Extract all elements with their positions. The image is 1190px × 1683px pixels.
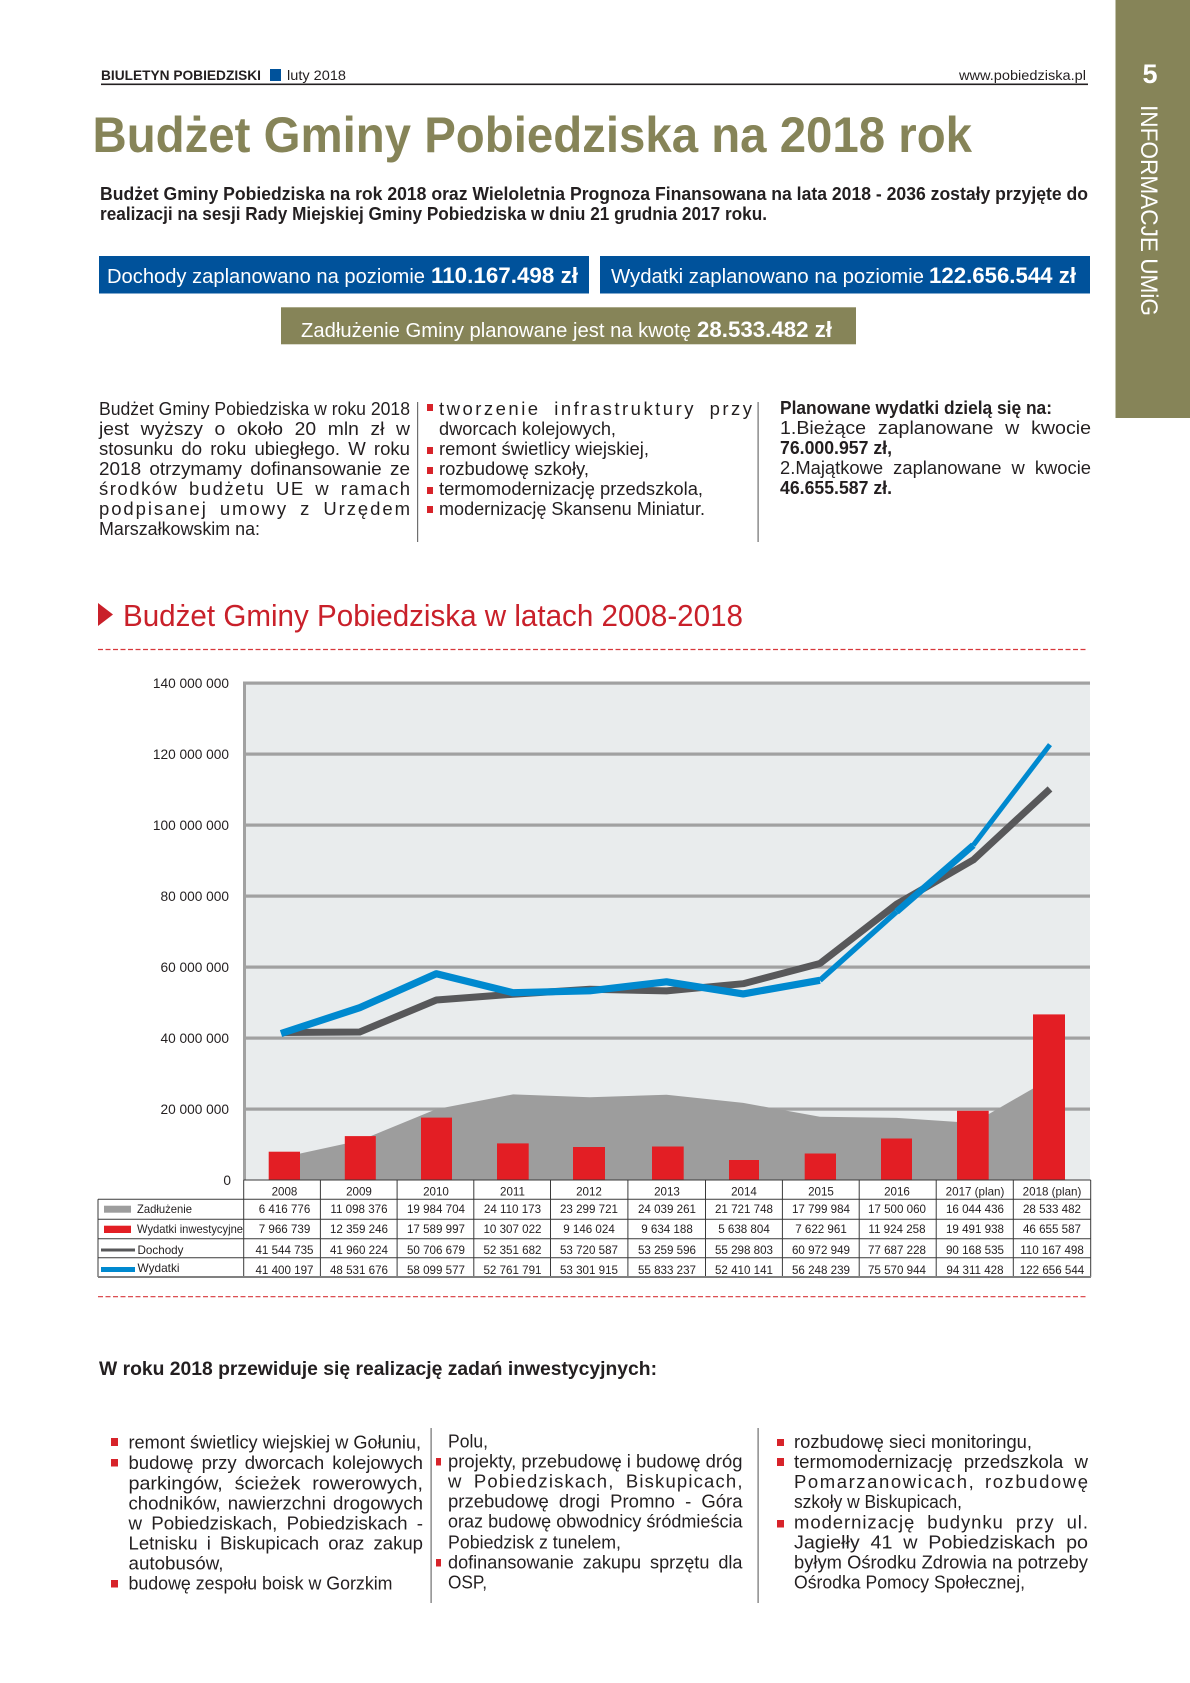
investment list: column 1: w Pobiedziskach, Pobiedziskach - bbox=[127, 1512, 423, 1534]
row: debt: 17 799 984 bbox=[792, 1203, 851, 1216]
row: investment expenditure bbox=[259, 1223, 1081, 1236]
year headers: 2009 bbox=[346, 1186, 372, 1198]
row: expenditure: 94 311 428 bbox=[946, 1264, 1004, 1277]
y axis labels: 20 000 000 bbox=[160, 1102, 229, 1117]
year headers: 2014 bbox=[731, 1186, 757, 1198]
investment list: column 3: Jagiełły 41 w Pobiedziskach po bbox=[794, 1532, 1088, 1552]
row: debt: 24 110 173 bbox=[484, 1203, 541, 1216]
investment list: column 1: budowę przy dworcach kolejowych bbox=[128, 1452, 423, 1473]
callout: planned debt: Zadłużenie Gminy planowane jest na kwotę bbox=[301, 320, 691, 342]
investment list: column 1: Letnisku i Biskupicach oraz zakup bbox=[128, 1532, 423, 1554]
investment list: column 3: modernizację budynku przy ul. bbox=[794, 1512, 1088, 1532]
sidebar tab: page number and section bbox=[1116, 0, 1190, 418]
bullet list: EU co-financed projects: rozbudowę szkoły, bbox=[439, 458, 589, 479]
data table with legend bbox=[98, 1180, 1091, 1278]
callout: planned debt: 28.533.482 zł bbox=[697, 317, 832, 342]
row: debt bbox=[259, 1203, 1081, 1216]
row: revenue: 110 167 498 bbox=[1020, 1244, 1084, 1257]
text column: planned expenditure split: 1.Bieżące zaplanowane w kwocie bbox=[780, 417, 1091, 438]
investment list: column 2: Pobiedzisk z tunelem, bbox=[448, 1532, 621, 1552]
bullet list: EU co-financed projects bbox=[427, 398, 753, 519]
running header: BIULETYN POBIEDZISKI bbox=[101, 67, 261, 83]
investment list: column 3 bbox=[777, 1431, 1089, 1592]
intro text: Budżet Gminy Pobiedziska na rok 2018 oraz Wieloletnia Prognoza Finansowana na lata 2018 - 2036 zostały przyjęte do bbox=[100, 183, 1088, 204]
year headers: 2010 bbox=[423, 1186, 449, 1198]
bullet list: EU co-financed projects: dworcach kolejowych, bbox=[439, 418, 616, 439]
text column: budget intro: Marszałkowskim na: bbox=[99, 518, 260, 539]
y axis labels: 120 000 000 bbox=[153, 747, 229, 762]
investment list: column 3: byłym Ośrodku Zdrowia na potrzeby bbox=[794, 1552, 1089, 1572]
investment list: column 3: rozbudowę sieci monitoringu, bbox=[794, 1431, 1032, 1452]
year headers: 2016 bbox=[884, 1186, 910, 1198]
text column: budget intro bbox=[98, 398, 411, 539]
intro text: realizacji na sesji Rady Miejskiej Gminy Pobiedziska w dniu 21 grudnia 2017 roku. bbox=[100, 203, 767, 224]
year headers: 2011 bbox=[500, 1186, 525, 1198]
row: revenue: 50 706 679 bbox=[407, 1244, 465, 1257]
running header: luty 2018 bbox=[287, 67, 346, 83]
text column: budget intro: podpisanej umowy z Urzędem bbox=[99, 498, 410, 519]
row: investment expenditure: 12 359 246 bbox=[330, 1223, 388, 1236]
investment list: column 1 bbox=[111, 1432, 423, 1594]
investment list: column 2 bbox=[436, 1430, 743, 1592]
row: investment expenditure: 9 146 024 bbox=[563, 1223, 615, 1236]
y axis labels: 60 000 000 bbox=[160, 960, 229, 975]
heading: 2018 investments: W roku 2018 przewiduje się realizację zadań inwestycyjnych: bbox=[99, 1358, 657, 1380]
row: expenditure: 122 656 544 bbox=[1020, 1264, 1085, 1277]
sidebar tab: page number and section: INFORMACJE UMiG bbox=[1135, 105, 1162, 316]
text column: budget intro: jest wyższy o około 20 mln zł w bbox=[98, 418, 411, 439]
legend bbox=[101, 1203, 243, 1275]
investment list: column 1: autobusów, bbox=[128, 1552, 224, 1574]
y axis labels: 0 bbox=[223, 1173, 231, 1188]
row: debt: 28 533 482 bbox=[1023, 1203, 1081, 1216]
row: revenue bbox=[255, 1244, 1084, 1257]
y axis labels bbox=[153, 676, 231, 1188]
row: investment expenditure: 46 655 587 bbox=[1023, 1223, 1081, 1236]
row: revenue: 60 972 949 bbox=[792, 1244, 850, 1257]
y axis labels: 40 000 000 bbox=[160, 1031, 229, 1046]
row: revenue: 53 720 587 bbox=[560, 1244, 618, 1257]
row: expenditure: 52 410 141 bbox=[715, 1264, 773, 1277]
divider bbox=[758, 1428, 759, 1603]
legend: Zadłużenie bbox=[137, 1203, 192, 1216]
investment list: column 2: Polu, bbox=[448, 1430, 488, 1452]
row: expenditure: 75 570 944 bbox=[868, 1264, 927, 1277]
text column: planned expenditure split: Planowane wydatki dzielą się na: bbox=[780, 397, 1052, 418]
callout: planned expenditure: 122.656.544 zł bbox=[929, 263, 1076, 288]
running header bbox=[101, 67, 1088, 85]
investment list: column 2: przebudowę drogi Promno - Góra bbox=[448, 1490, 743, 1512]
row: investment expenditure: 10 307 022 bbox=[483, 1223, 542, 1236]
investment list: column 3: Pomarzanowicach, rozbudowę bbox=[794, 1471, 1088, 1492]
row: debt: 17 500 060 bbox=[868, 1203, 926, 1216]
row: revenue: 90 168 535 bbox=[946, 1244, 1004, 1257]
row: investment expenditure: 11 924 258 bbox=[868, 1223, 926, 1236]
text column: budget intro: 2018 otrzymamy dofinansowanie ze bbox=[99, 458, 410, 479]
investment list: column 2: oraz budowę obwodnicy śródmieścia bbox=[448, 1510, 743, 1532]
row: expenditure: 48 531 676 bbox=[330, 1264, 388, 1277]
investment list: column 1: parkingów, ścieżek rowerowych, bbox=[128, 1472, 423, 1494]
year headers: 2017 (plan) bbox=[946, 1186, 1004, 1198]
title: Budżet Gminy Pobiedziska na 2018 rok bbox=[92, 107, 972, 163]
row: investment expenditure: 5 638 804 bbox=[718, 1223, 770, 1236]
investment list: column 3: szkoły w Biskupicach, bbox=[794, 1491, 962, 1512]
row: debt: 24 039 261 bbox=[638, 1203, 696, 1216]
bars: investment expenditure bbox=[269, 1014, 1065, 1180]
y axis labels: 140 000 000 bbox=[153, 676, 229, 691]
callout: planned revenue bbox=[99, 256, 589, 294]
row: debt: 6 416 776 bbox=[259, 1203, 310, 1216]
bullet list: EU co-financed projects: termomodernizację przedszkola, bbox=[439, 478, 703, 499]
chart: budget 2008-2018 bbox=[153, 676, 1090, 1188]
row: expenditure bbox=[255, 1264, 1085, 1277]
divider bbox=[417, 402, 418, 542]
year headers: 2013 bbox=[654, 1186, 680, 1198]
area: debt bbox=[283, 1079, 1050, 1180]
investment list: column 3: termomodernizację przedszkola w bbox=[794, 1451, 1089, 1472]
bullet list: EU co-financed projects: tworzenie infrastruktury przy bbox=[439, 398, 753, 419]
row: debt: 23 299 721 bbox=[560, 1203, 618, 1216]
legend: Dochody bbox=[138, 1244, 184, 1257]
text column: planned expenditure split: 46.655.587 zł. bbox=[780, 477, 892, 498]
row: investment expenditure: 19 491 938 bbox=[946, 1223, 1004, 1236]
investment list: column 2: dofinansowanie zakupu sprzętu dla bbox=[448, 1552, 743, 1572]
sidebar tab: page number and section: 5 bbox=[1142, 59, 1158, 89]
row: debt: 21 721 748 bbox=[715, 1203, 773, 1216]
year headers: 2018 (plan) bbox=[1023, 1186, 1081, 1198]
row: investment expenditure: 7 622 961 bbox=[795, 1223, 847, 1236]
text column: budget intro: środków budżetu UE w ramach bbox=[99, 478, 410, 499]
investment list: column 1: remont świetlicy wiejskiej w Gołuniu, bbox=[128, 1432, 421, 1452]
investment list: column 3: Ośrodka Pomocy Społecznej, bbox=[794, 1572, 1025, 1592]
row: expenditure: 55 833 237 bbox=[638, 1264, 696, 1277]
divider bbox=[758, 402, 759, 542]
line: expenditure bbox=[281, 745, 1050, 1034]
divider bbox=[430, 1428, 432, 1603]
text column: planned expenditure split bbox=[780, 397, 1091, 498]
callout: planned revenue: Dochody zaplanowano na poziomie bbox=[107, 266, 425, 288]
row: revenue: 41 960 224 bbox=[330, 1244, 389, 1257]
callout: planned revenue: 110.167.498 zł bbox=[431, 263, 578, 288]
year headers: 2008 bbox=[272, 1186, 297, 1198]
text column: planned expenditure split: 76.000.957 zł, bbox=[780, 437, 892, 458]
row: revenue: 55 298 803 bbox=[715, 1244, 773, 1257]
text column: budget intro: Budżet Gminy Pobiedziska w roku 2018 bbox=[99, 398, 410, 419]
intro text bbox=[100, 183, 1088, 224]
row: expenditure: 52 761 791 bbox=[483, 1264, 542, 1277]
investment list: column 2: projekty, przebudowę i budowę dróg bbox=[448, 1450, 742, 1472]
callout: planned expenditure bbox=[600, 256, 1090, 294]
row: expenditure: 58 099 577 bbox=[407, 1264, 465, 1277]
bullet list: EU co-financed projects: modernizację Skansenu Miniatur. bbox=[439, 498, 705, 519]
row: revenue: 53 259 596 bbox=[638, 1244, 696, 1257]
investment list: column 2: w Pobiedziskach, Biskupicach, bbox=[447, 1470, 742, 1492]
legend: Wydatki bbox=[138, 1262, 180, 1275]
row: revenue: 77 687 228 bbox=[868, 1244, 926, 1257]
line: revenue bbox=[283, 789, 1050, 1032]
callout: planned debt bbox=[281, 307, 856, 344]
running header: www.pobiedziska.pl bbox=[958, 67, 1086, 83]
row: debt: 16 044 436 bbox=[946, 1203, 1004, 1216]
investment list: column 1: chodników, nawierzchni drogowych bbox=[128, 1492, 423, 1514]
row: expenditure: 56 248 239 bbox=[792, 1264, 850, 1277]
y axis labels: 100 000 000 bbox=[153, 818, 229, 833]
text column: budget intro: stosunku do roku ubiegłego. W roku bbox=[99, 438, 410, 459]
bullet list: EU co-financed projects: remont świetlicy wiejskiej, bbox=[439, 438, 649, 459]
investment list: column 2: OSP, bbox=[448, 1572, 487, 1592]
section heading with arrow: Budżet Gminy Pobiedziska w latach 2008-2018 bbox=[123, 598, 743, 633]
row: revenue: 52 351 682 bbox=[483, 1244, 542, 1257]
y axis labels: 80 000 000 bbox=[160, 889, 229, 904]
year headers: 2012 bbox=[576, 1186, 602, 1198]
row: investment expenditure: 7 966 739 bbox=[259, 1223, 310, 1236]
legend: Wydatki inwestycyjne bbox=[137, 1223, 243, 1236]
year headers: 2015 bbox=[808, 1186, 834, 1198]
row: revenue: 41 544 735 bbox=[255, 1244, 314, 1257]
investment list: column 1: budowę zespołu boisk w Gorzkim bbox=[128, 1572, 392, 1594]
row: expenditure: 41 400 197 bbox=[255, 1264, 314, 1277]
row: investment expenditure: 17 589 997 bbox=[407, 1223, 465, 1236]
text column: planned expenditure split: 2.Majątkowe zaplanowane w kwocie bbox=[780, 457, 1091, 478]
year headers bbox=[272, 1186, 1081, 1198]
callout: planned expenditure: Wydatki zaplanowano na poziomie bbox=[611, 266, 924, 288]
row: debt: 11 098 376 bbox=[330, 1203, 388, 1216]
row: debt: 19 984 704 bbox=[407, 1203, 466, 1216]
row: expenditure: 53 301 915 bbox=[560, 1264, 618, 1277]
row: investment expenditure: 9 634 188 bbox=[641, 1223, 693, 1236]
